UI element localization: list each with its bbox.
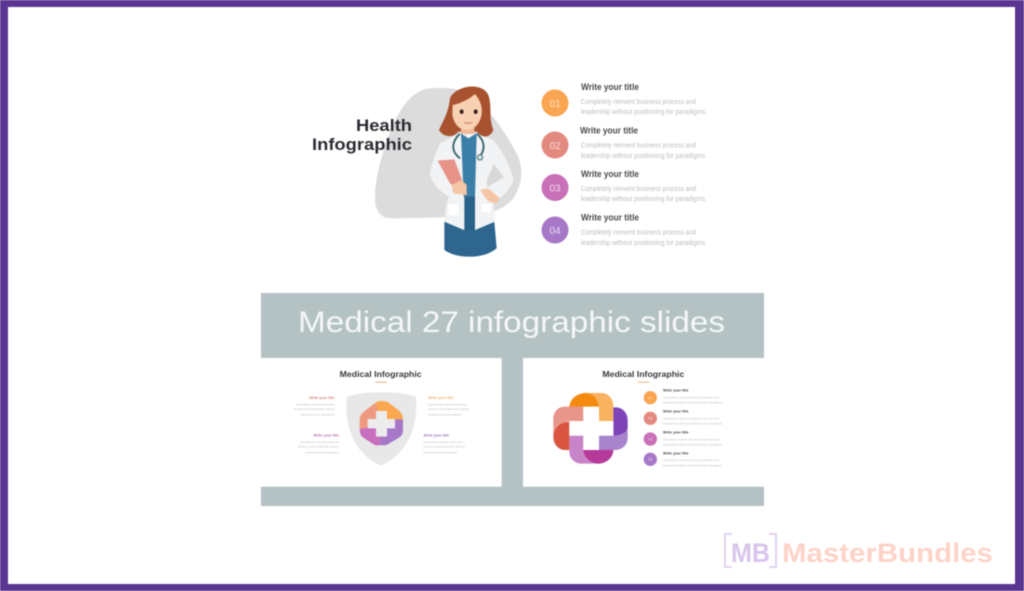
right text blocks: Completely reinvent business bbox=[428, 402, 467, 406]
item 02 bbox=[542, 126, 707, 160]
list: Completely reinvent business process and bbox=[663, 458, 719, 462]
slide heading: Medical Infographic bbox=[602, 369, 685, 379]
list: Write your title bbox=[663, 389, 689, 393]
list: leadership without positioning for paradigms. bbox=[663, 401, 723, 405]
neck bbox=[461, 123, 474, 139]
list bbox=[644, 389, 723, 467]
heading: Health Infographic: Infographic bbox=[312, 135, 412, 154]
shield bbox=[346, 392, 416, 466]
hands bbox=[452, 180, 467, 195]
illustration: doctor bbox=[430, 87, 513, 257]
stethoscope bbox=[453, 134, 484, 158]
list: 02 bbox=[648, 417, 652, 421]
list: leadership without positioning for paradigms. bbox=[663, 421, 723, 425]
list: 04 bbox=[648, 458, 652, 462]
hexagon cross icon bbox=[360, 401, 403, 445]
item 02: Write your title bbox=[580, 126, 638, 136]
item 03 bbox=[542, 169, 707, 203]
item 04: leadership without positioning for paradigms. bbox=[581, 240, 707, 247]
grey blob bbox=[375, 88, 521, 218]
list: four numbered items bbox=[542, 82, 707, 247]
item 02: 02 bbox=[549, 141, 561, 152]
left text blocks: Completely reinvent business bbox=[296, 402, 335, 406]
item 02: Completely reinvent business process and bbox=[581, 142, 696, 150]
heading: Health Infographic bbox=[312, 116, 412, 154]
right text blocks: Write your title bbox=[424, 434, 449, 438]
logo: MasterBundles: MB bbox=[731, 538, 770, 568]
panel: left slide bbox=[261, 358, 502, 487]
banner title: Medical 27 infographic slides bbox=[298, 306, 725, 339]
list: leadership without positioning for paradigms. bbox=[663, 463, 723, 467]
left text blocks: Write your title bbox=[313, 434, 339, 438]
heading: Health Infographic: Health bbox=[356, 116, 412, 135]
skirt bbox=[444, 222, 497, 257]
face bbox=[452, 94, 482, 130]
list: Write your title bbox=[663, 452, 689, 456]
right text blocks: Write your title bbox=[428, 396, 454, 400]
list: 01 bbox=[648, 396, 652, 400]
medical cross icon bbox=[553, 393, 628, 464]
arm gap bbox=[487, 164, 504, 187]
right text blocks bbox=[424, 396, 469, 454]
left text blocks: positioning for paradigms bbox=[301, 413, 335, 417]
left text blocks bbox=[294, 396, 340, 454]
right text blocks: positioning for paradigms bbox=[428, 413, 462, 417]
right text blocks: process and leadership without bbox=[428, 407, 469, 411]
list: Write your title bbox=[663, 431, 689, 435]
list: Completely reinvent business process and bbox=[663, 437, 719, 441]
logo: MasterBundles: MasterBundles bbox=[782, 538, 993, 568]
item 04: 04 bbox=[549, 226, 561, 237]
logo: MasterBundles bbox=[725, 534, 993, 568]
item 03: 03 bbox=[549, 184, 561, 194]
item 03: Write your title bbox=[581, 169, 639, 179]
eyes and mouth bbox=[460, 109, 478, 114]
item 01: 01 bbox=[549, 99, 561, 110]
coat pockets bbox=[448, 204, 491, 215]
left text blocks: positioning for paradigms bbox=[306, 450, 339, 454]
item 04 bbox=[542, 212, 707, 247]
hair bbox=[439, 87, 493, 136]
item 01: Write your title bbox=[581, 82, 639, 92]
item 01: leadership without positioning for paradigms. bbox=[581, 109, 707, 116]
list: Completely reinvent business process and bbox=[663, 395, 719, 399]
list: Write your title bbox=[663, 410, 689, 414]
banner background bbox=[261, 293, 764, 506]
left text blocks: Completely reinvent business bbox=[300, 440, 340, 444]
slide heading: Medical Infographic bbox=[340, 369, 422, 379]
right text blocks: process and leadership without bbox=[424, 445, 465, 449]
item 03: Completely reinvent business process and bbox=[581, 186, 696, 193]
right text blocks: positioning for paradigms bbox=[424, 450, 458, 454]
list: 03 bbox=[648, 437, 652, 441]
blue shirt bbox=[464, 193, 475, 230]
item 04: Write your title bbox=[581, 212, 639, 222]
item 03: leadership without positioning for paradigms. bbox=[581, 196, 707, 203]
left text blocks: Write your title bbox=[309, 396, 335, 400]
left text blocks: process and leadership without bbox=[294, 407, 335, 411]
item 02: leadership without positioning for paradigms. bbox=[581, 153, 707, 160]
panel: right slide bbox=[523, 358, 767, 487]
clipboard bbox=[438, 159, 468, 195]
left text blocks: process and leadership without bbox=[298, 445, 339, 449]
list: Completely reinvent business process and bbox=[663, 416, 719, 420]
lab coat bbox=[430, 134, 513, 230]
item 01 bbox=[542, 82, 707, 116]
right text blocks: Completely reinvent business bbox=[424, 440, 463, 444]
item 04: Completely reinvent business process and bbox=[581, 230, 696, 236]
item 01: Completely reinvent business process and bbox=[581, 99, 696, 106]
list: leadership without positioning for paradigms. bbox=[663, 442, 723, 446]
